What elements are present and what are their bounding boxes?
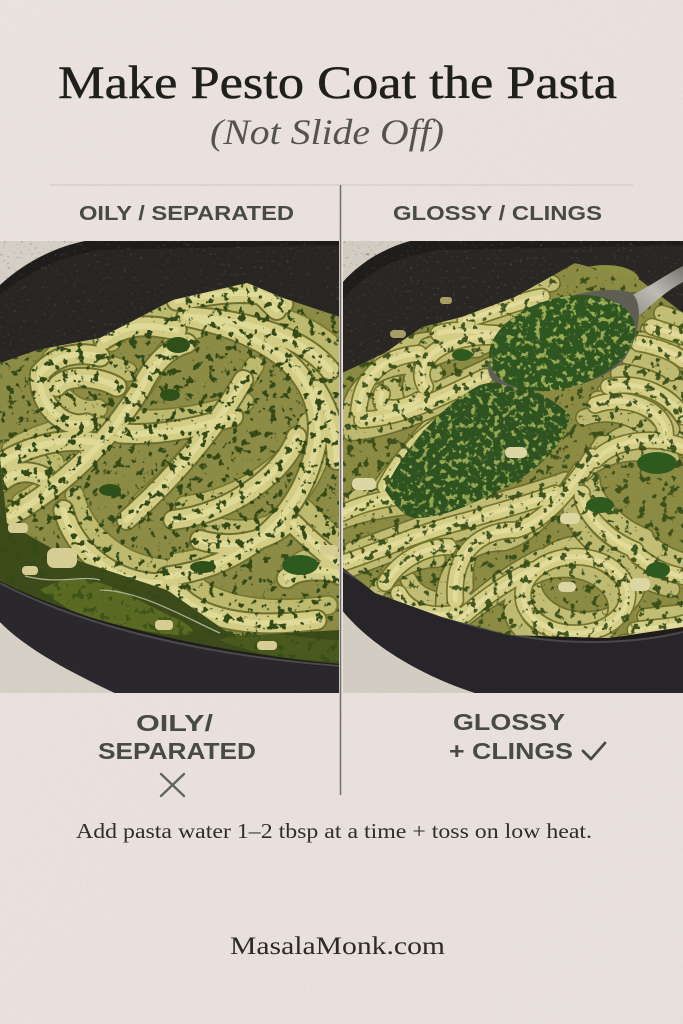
bottom label: glossy clings: GLOSSY [453,709,565,735]
bottom label: oily separated: OILY/ [136,710,214,736]
pesto smear [385,382,570,518]
bottom label: glossy clings: + CLINGS [449,738,573,764]
pan body [342,241,683,693]
column heading: glossy / clings: GLOSSY / CLINGS [393,203,602,225]
photo: oily separated pesto pasta in pan [0,241,351,693]
website credit: MasalaMonk.com [230,931,445,960]
pan body [0,241,339,693]
instruction caption: Add pasta water 1–2 tbsp at a time + toss on low heat. [76,819,592,843]
photo: glossy clinging pesto pasta with spoon [331,241,683,693]
title: Make Pesto Coat the Pasta [58,57,617,109]
oil glints [25,576,220,633]
subtitle: (Not Slide Off) [210,112,444,152]
bottom label: oily separated [98,710,256,764]
spoon with pesto [488,266,683,391]
pine nuts [8,523,338,650]
icon: check mark [583,743,605,759]
bottom label: glossy clings [449,709,573,764]
pasta mound [0,272,351,640]
green patches [452,349,677,578]
bottom label: oily separated: SEPARATED [98,738,256,764]
oil puddle [0,460,339,664]
center divider [340,185,342,795]
pasta mound [331,260,683,646]
column heading: oily / separated: OILY / SEPARATED [79,203,294,225]
icon: cross [161,774,184,796]
pine nuts [352,297,650,592]
stray pasta behind spoon [588,265,639,280]
